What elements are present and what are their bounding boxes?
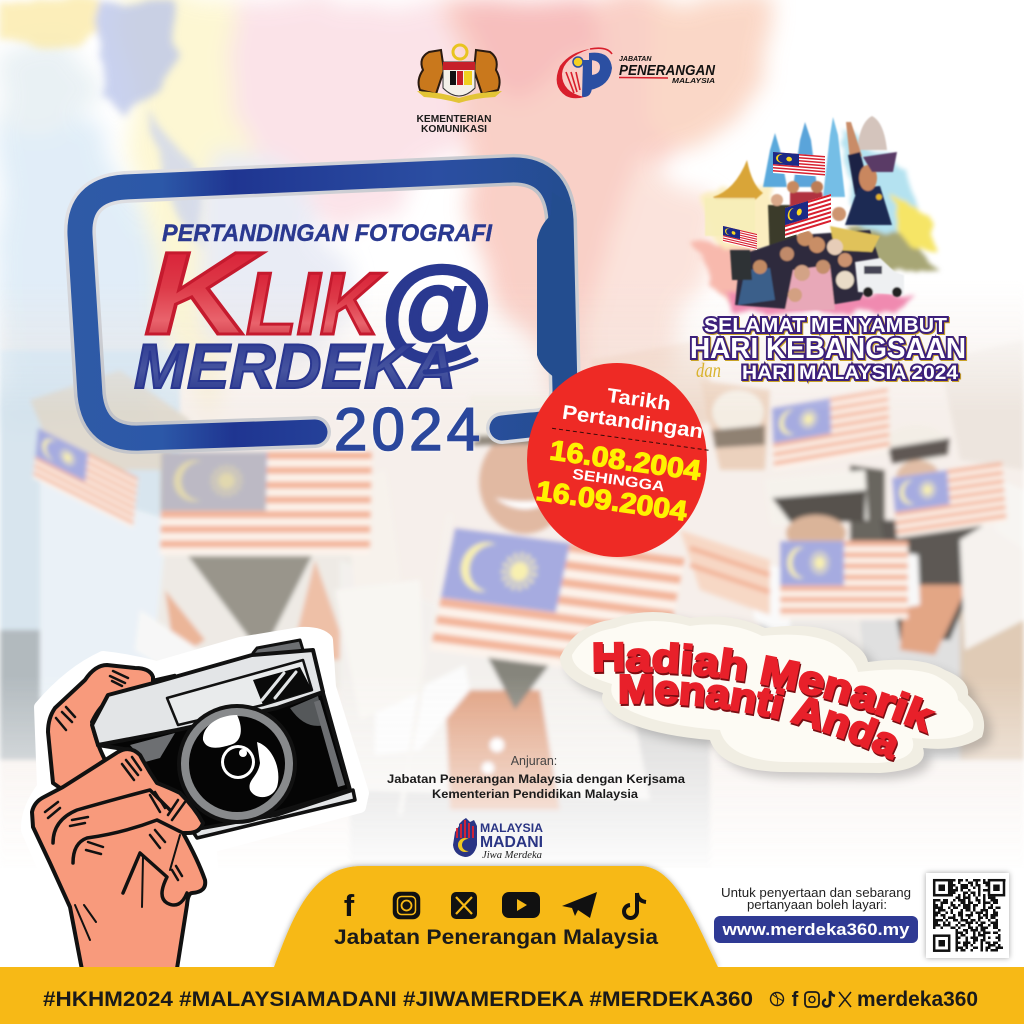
text: hashtags: #HKHM2024 #MALAYSIAMADANI #JIWAMERDEKA #MERDEKA360	[43, 988, 753, 1011]
icon: hand with crescent	[453, 818, 477, 857]
left student	[158, 554, 336, 680]
text: merdeka360 handle: merdeka360	[857, 988, 978, 1011]
date: to: 16.09.2004	[534, 475, 689, 527]
logo: Malaysia Madani: Jiwa Merdeka	[482, 849, 542, 861]
greeting text	[690, 315, 966, 384]
text: enquiry note	[721, 886, 911, 912]
right students	[700, 380, 770, 470]
skyline towers	[763, 116, 887, 197]
camera bottom plate	[192, 790, 355, 838]
swoosh tail	[425, 360, 476, 372]
footer social icons: f	[792, 989, 799, 1011]
logo: Malaysia Madani: MADANI	[480, 834, 543, 851]
text: organiser	[387, 754, 685, 801]
logo: Malaysia Madani	[453, 818, 543, 861]
footer bar	[0, 967, 1024, 1024]
badge: competition dates: Pertandingan	[561, 402, 704, 443]
text: enquiry note: Untuk penyertaan dan sebarang	[721, 886, 911, 900]
wordmark: at sign: @	[381, 244, 493, 369]
text: organiser: Jabatan Penerangan Malaysia dengan Kerjsama	[387, 772, 685, 786]
date: from: 16.08.2004	[548, 434, 703, 486]
title logo: Klik@Merdeka 2024	[80, 170, 575, 463]
logo: Kementerian Komunikasi crest	[416, 45, 502, 135]
camera top plate	[92, 650, 323, 745]
greeting text: SELAMAT MENYAMBUT	[704, 315, 947, 337]
top dial	[252, 638, 304, 654]
back finger	[48, 665, 153, 790]
logo: Jabatan Penerangan Malaysia: PENERANGAN	[619, 63, 715, 79]
prize text: Menanti Anda	[620, 674, 898, 762]
subtitle: PERTANDINGAN FOTOGRAFI	[162, 220, 493, 247]
camera body	[98, 693, 350, 837]
lens	[177, 704, 297, 824]
illustration: hand holding camera	[27, 633, 363, 975]
greeting text: HARI MALAYSIA 2024	[742, 363, 958, 384]
viewfinder frame	[167, 660, 312, 725]
callout: prize cloud	[560, 612, 996, 784]
background: bottom white fade	[0, 868, 1024, 968]
text: ministry name: KEMENTERIAN	[416, 113, 492, 125]
script: dan: dan	[696, 360, 721, 382]
flags	[773, 152, 825, 177]
bottom tab: social media	[274, 866, 718, 967]
centre student	[337, 632, 648, 799]
badge: competition dates	[527, 363, 716, 557]
QR code	[926, 873, 1009, 958]
badge: competition dates: SEHINGGA	[571, 467, 666, 496]
golden roof building	[705, 160, 763, 236]
logo: Malaysia Madani: MALAYSIA	[480, 823, 543, 835]
frame	[80, 170, 565, 438]
viewfinder window	[253, 667, 312, 705]
logo: Jabatan Penerangan Malaysia	[557, 48, 715, 98]
white 4x4 vehicle	[855, 258, 904, 297]
year: 2024	[334, 396, 480, 463]
text: enquiry note: pertanyaan boleh layari:	[747, 898, 887, 912]
white sticker outline	[30, 626, 369, 816]
logo: Kementerian Komunikasi crest: KOMUNIKASI	[421, 123, 487, 135]
greeting text: HARI KEBANGSAAN	[690, 333, 966, 365]
collage: national day montage	[690, 116, 966, 384]
finger creases	[45, 671, 187, 940]
icon: tiktok	[624, 893, 646, 918]
icon: coat of arms	[417, 45, 502, 103]
label: Tarikh Pertandingan: Tarikh	[606, 385, 672, 415]
watercolour splashes	[690, 125, 940, 314]
logo: Jabatan Penerangan Malaysia: MALAYSIA	[672, 76, 715, 85]
icon: youtube	[502, 892, 540, 918]
text: handle: Jabatan Penerangan Malaysia	[334, 925, 659, 949]
frame: right thick section	[537, 192, 575, 385]
hand	[32, 749, 205, 975]
icon: JP emblem	[557, 48, 612, 98]
prize text: Hadiah Menarik	[593, 642, 938, 736]
wordmark: MERDEKA: MERDEKA	[134, 332, 456, 402]
footer social icons	[770, 989, 851, 1011]
button: website	[714, 916, 918, 943]
icon: facebook: f	[344, 888, 355, 923]
text: organiser: Kementerian Pendidikan Malaysia	[432, 787, 638, 801]
icon: telegram	[562, 892, 597, 918]
crowd base	[1, 332, 1024, 799]
text: organiser: Anjuran:	[511, 754, 557, 768]
wordmark: KLIK: LIK	[246, 254, 385, 353]
text: department name: JABATAN	[619, 56, 652, 63]
wordmark: KLIK: K	[144, 228, 264, 360]
button: website: www.merdeka360.my	[721, 920, 910, 939]
background photo: marching students with flags	[0, 332, 1024, 842]
icon: instagram	[394, 893, 419, 918]
leader figure	[845, 122, 897, 225]
icon: X	[451, 892, 477, 919]
crowd of people	[730, 181, 880, 310]
flags	[160, 452, 372, 555]
wordmark: KLIK	[144, 228, 385, 360]
